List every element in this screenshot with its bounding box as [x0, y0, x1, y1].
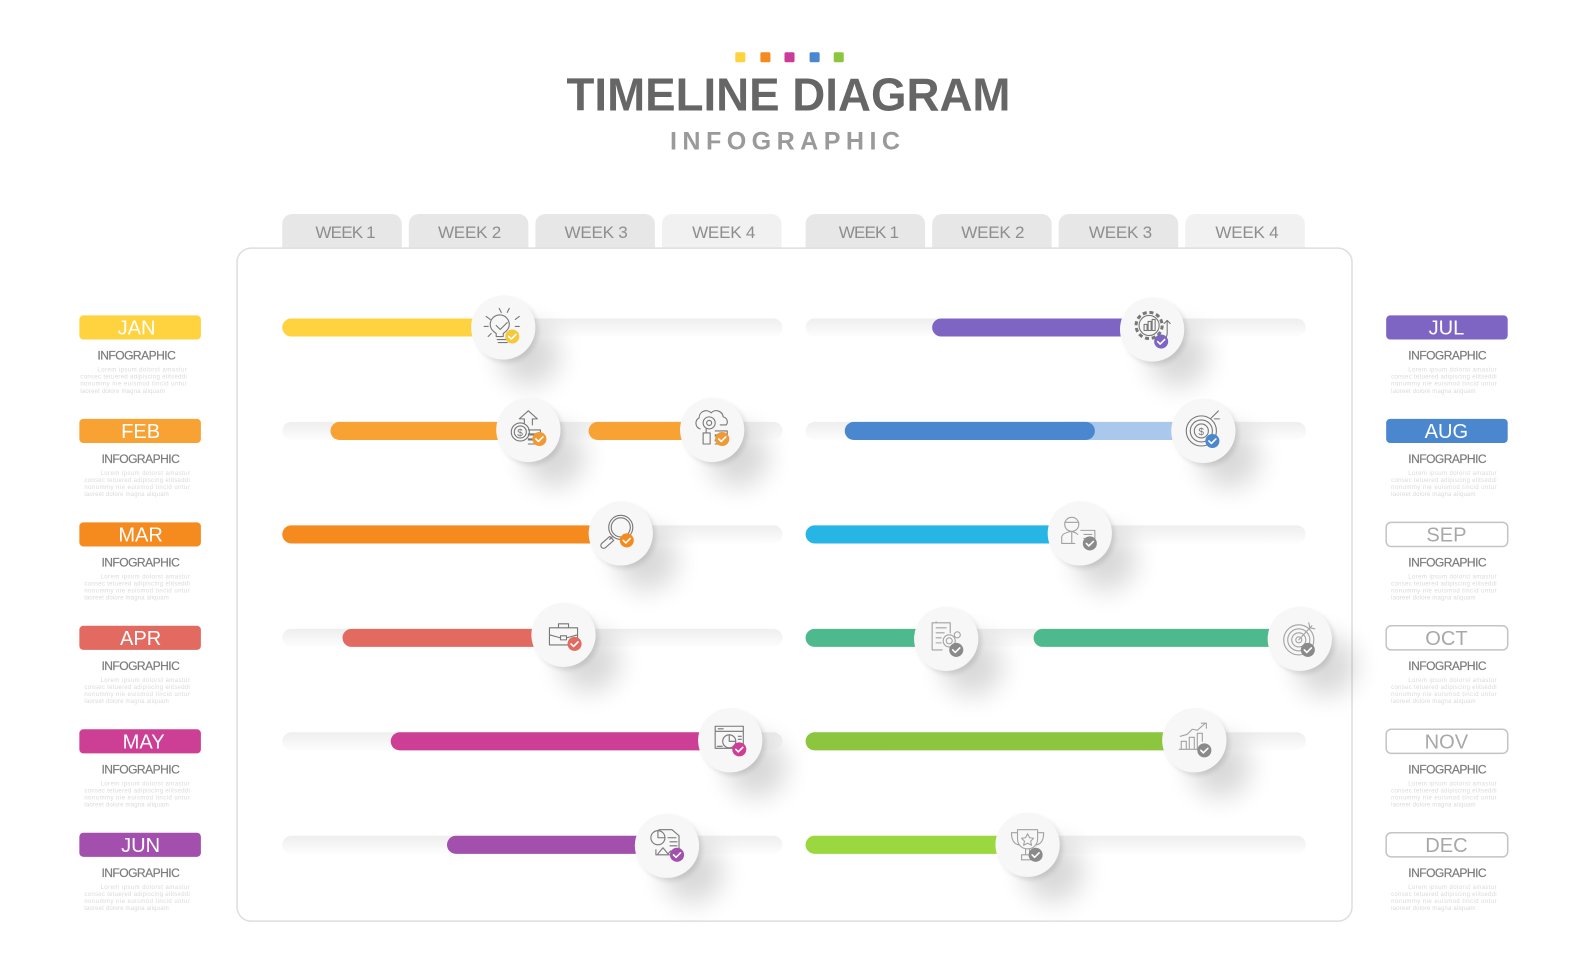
label: January: consec tetuered adipiscing elitseddi — [80, 375, 187, 381]
icon: magnifier — [589, 501, 656, 569]
label: May: laoreet dolore magna aliquam — [84, 803, 169, 809]
label: January: nonummy nie euismod tincid untur — [80, 382, 187, 388]
label: October: INFOGRAPHIC — [1408, 659, 1487, 673]
label: December: nonummy nie euismod tincid untur — [1391, 899, 1497, 905]
label: December: consec tetuered adipiscing elitseddi — [1391, 892, 1497, 898]
label: February: nonummy nie euismod tincid untur — [84, 485, 190, 491]
label: August: nonummy nie euismod tincid untur — [1391, 485, 1497, 491]
label: July: laoreet dolore magna aliquam — [1391, 389, 1476, 395]
label: October: laoreet dolore magna aliquam — [1391, 699, 1476, 705]
icon: report document — [635, 814, 702, 881]
label: December: Lorem ipsum dolorst amastur — [1408, 885, 1497, 891]
bar: May — [391, 732, 712, 750]
label: June: JUN — [121, 835, 160, 857]
label: February: consec tetuered adipiscing elitseddi — [84, 478, 190, 484]
icon: dollar target — [1171, 399, 1239, 466]
label: March: MAR — [118, 524, 163, 546]
label: May: Lorem ipsum dolorst amastur — [100, 782, 190, 788]
bars: August — [845, 422, 1185, 440]
label: May: INFOGRAPHIC — [101, 762, 180, 776]
week tabs: second half: WEEK 1 — [839, 223, 899, 242]
label: January: Lorem ipsum dolorst amastur — [97, 368, 187, 374]
label: April: Lorem ipsum dolorst amastur — [100, 678, 190, 684]
week tabs: first half: WEEK 1 — [315, 223, 376, 242]
label: April: INFOGRAPHIC — [101, 659, 180, 673]
label: August: Lorem ipsum dolorst amastur — [1408, 471, 1497, 477]
icon: money growth: $ — [517, 428, 523, 439]
icon: cloud settings — [680, 398, 747, 465]
label: October: Lorem ipsum dolorst amastur — [1408, 678, 1497, 684]
label: January: JAN — [118, 318, 156, 340]
icon: gear chart — [1120, 297, 1187, 365]
label: February: Lorem ipsum dolorst amastur — [100, 471, 190, 477]
label: November: INFOGRAPHIC — [1408, 762, 1487, 776]
bar: March — [282, 525, 602, 543]
label: April — [79, 626, 201, 705]
label: September: nonummy nie euismod tincid untur — [1391, 589, 1497, 595]
label: October: OCT — [1425, 628, 1468, 650]
week tabs: first half: WEEK 4 — [692, 223, 755, 242]
icon: web analytics — [698, 708, 765, 775]
label: July: consec tetuered adipiscing elitseddi — [1391, 375, 1497, 381]
label: March: Lorem ipsum dolorst amastur — [100, 575, 190, 581]
label: June: consec tetuered adipiscing elitseddi — [84, 892, 190, 898]
label: June — [79, 833, 201, 912]
bar: June — [447, 836, 648, 854]
label: June: laoreet dolore magna aliquam — [84, 906, 169, 912]
label: February: INFOGRAPHIC — [101, 452, 180, 466]
label: July: Lorem ipsum dolorst amastur — [1408, 368, 1497, 374]
label: December — [1386, 833, 1508, 912]
label: March: nonummy nie euismod tincid untur — [84, 589, 190, 595]
label: November: NOV — [1425, 731, 1469, 753]
label: January: laoreet dolore magna aliquam — [80, 389, 165, 395]
week tabs: second half: WEEK 2 — [961, 223, 1025, 242]
label: September: laoreet dolore magna aliquam — [1391, 596, 1476, 602]
icon: settings document — [914, 607, 981, 674]
label: May: nonummy nie euismod tincid untur — [84, 796, 190, 802]
label: July: INFOGRAPHIC — [1408, 349, 1487, 363]
label: August: consec tetuered adipiscing elitseddi — [1391, 478, 1497, 484]
label: September — [1386, 522, 1508, 602]
label: December: INFOGRAPHIC — [1408, 866, 1487, 880]
label: July: nonummy nie euismod tincid untur — [1391, 382, 1497, 388]
label: July — [1386, 315, 1508, 395]
icon: money growth — [496, 398, 564, 465]
label: May — [79, 729, 201, 809]
label: April: laoreet dolore magna aliquam — [84, 699, 169, 705]
bars: February — [330, 422, 694, 440]
label: February: FEB — [121, 421, 160, 443]
label: June: Lorem ipsum dolorst amastur — [100, 885, 190, 891]
label: August: laoreet dolore magna aliquam — [1391, 492, 1476, 498]
week tabs: first half — [282, 214, 781, 248]
icon: employee profile — [1048, 501, 1115, 569]
colour dots — [735, 52, 844, 62]
label: April: nonummy nie euismod tincid untur — [84, 692, 190, 698]
label: October: consec tetuered adipiscing elitseddi — [1391, 685, 1497, 691]
label: April: consec tetuered adipiscing elitseddi — [84, 685, 190, 691]
label: March: consec tetuered adipiscing elitseddi — [84, 582, 190, 588]
label: August: AUG — [1425, 421, 1468, 443]
bar: July — [932, 318, 1133, 337]
label: July: JUL — [1429, 318, 1464, 340]
bars: October — [806, 629, 1281, 647]
bar: April — [343, 629, 543, 647]
icon: growth chart — [1162, 708, 1229, 775]
label: August — [1386, 419, 1508, 498]
label: October — [1386, 626, 1508, 705]
icon: dollar target: $ — [1198, 427, 1204, 438]
icon: target — [1268, 607, 1335, 674]
bar: December — [806, 836, 1008, 854]
label: December: DEC — [1425, 835, 1468, 857]
label: November: consec tetuered adipiscing elitseddi — [1391, 789, 1497, 795]
label: November: Lorem ipsum dolorst amastur — [1408, 782, 1497, 788]
label: March: laoreet dolore magna aliquam — [84, 596, 169, 602]
main panel — [237, 248, 1352, 921]
label: September: consec tetuered adipiscing elitseddi — [1391, 582, 1497, 588]
label: September: Lorem ipsum dolorst amastur — [1408, 575, 1497, 581]
week tabs: second half — [806, 214, 1305, 248]
week tabs: first half: WEEK 2 — [438, 223, 501, 242]
week tabs: second half: WEEK 3 — [1089, 223, 1152, 242]
label: August: INFOGRAPHIC — [1408, 452, 1487, 466]
bar: January — [282, 318, 483, 337]
label: April: APR — [120, 628, 161, 650]
label: March — [79, 522, 201, 602]
icon: briefcase — [531, 603, 599, 670]
title: TIMELINE DIAGRAM — [567, 69, 1010, 121]
label: May: consec tetuered adipiscing elitseddi — [84, 789, 190, 795]
track rows — [282, 318, 1306, 854]
label: June: INFOGRAPHIC — [101, 866, 180, 880]
label: May: MAY — [123, 731, 165, 753]
week tabs: first half: WEEK 3 — [565, 223, 628, 242]
bar: September — [806, 525, 1062, 543]
label: February — [79, 419, 201, 498]
label: October: nonummy nie euismod tincid untur — [1391, 692, 1497, 698]
label: September: INFOGRAPHIC — [1408, 556, 1487, 570]
long icon shadows — [499, 325, 1356, 903]
label: January: INFOGRAPHIC — [97, 349, 176, 363]
label: January — [79, 315, 201, 395]
label: February: laoreet dolore magna aliquam — [84, 492, 169, 498]
subtitle: INFOGRAPHIC — [670, 128, 900, 156]
label: September: SEP — [1426, 524, 1467, 546]
icon: light bulb — [471, 295, 538, 363]
label: June: nonummy nie euismod tincid untur — [84, 899, 190, 905]
icon: trophy — [995, 813, 1063, 880]
week tabs: second half: WEEK 4 — [1215, 223, 1279, 242]
label: November — [1386, 729, 1508, 809]
label: November: laoreet dolore magna aliquam — [1391, 803, 1476, 809]
label: November: nonummy nie euismod tincid untur — [1391, 796, 1497, 802]
bar: November — [806, 732, 1175, 750]
label: March: INFOGRAPHIC — [101, 556, 180, 570]
label: December: laoreet dolore magna aliquam — [1391, 906, 1476, 912]
